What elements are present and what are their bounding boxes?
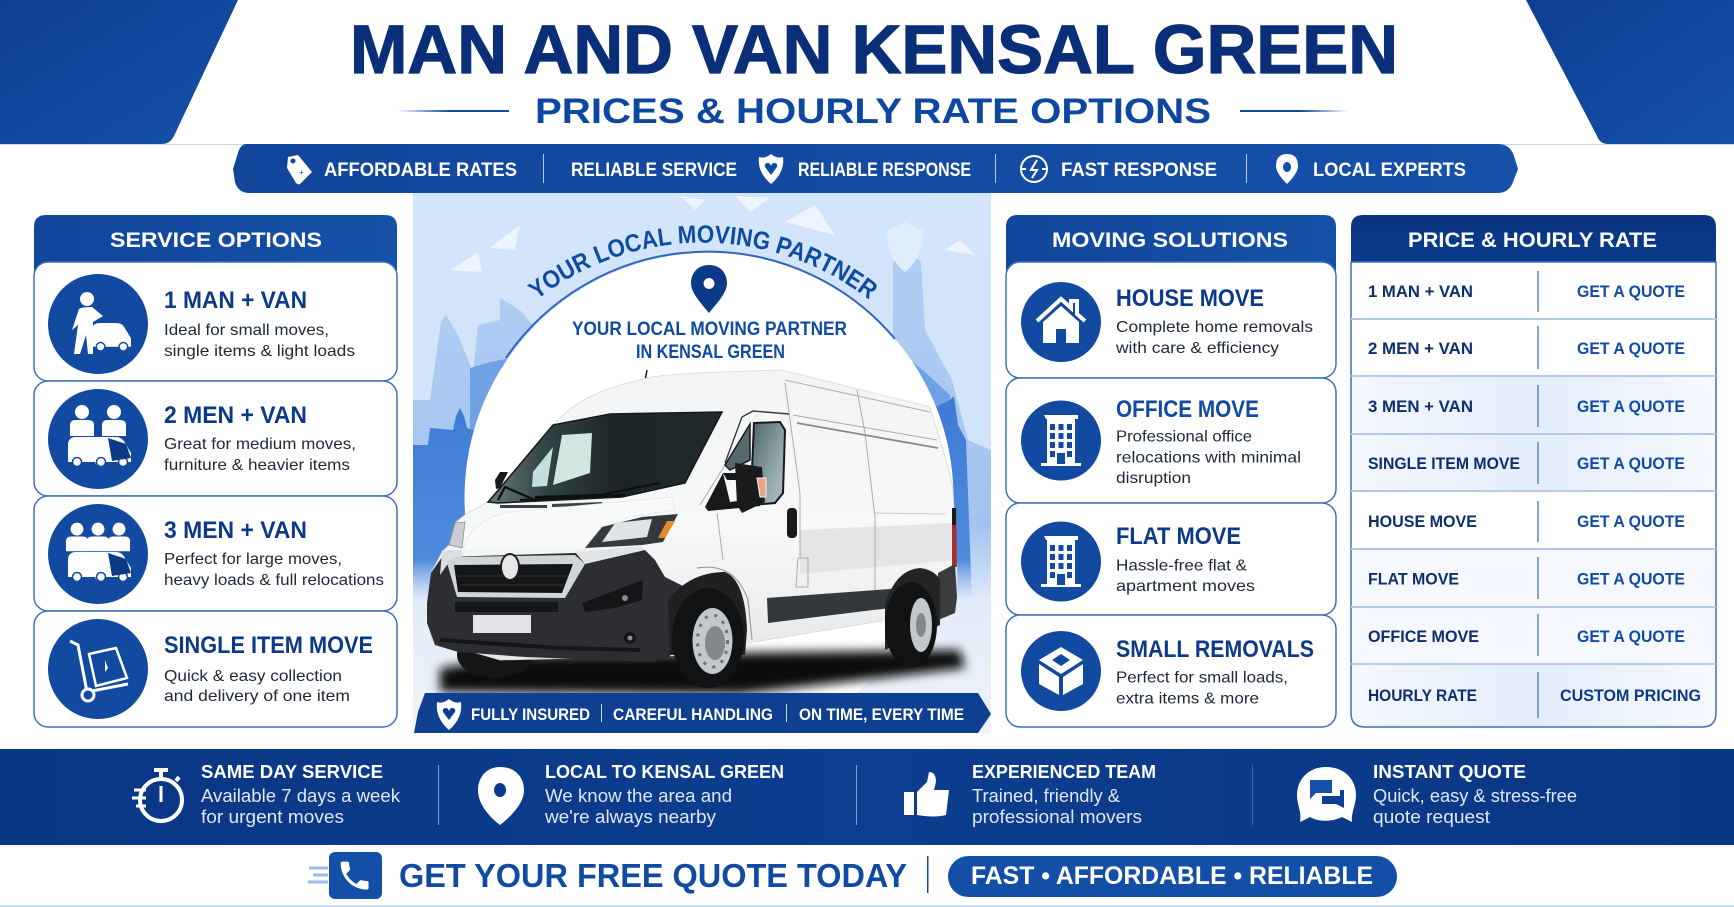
taillight: [952, 508, 957, 567]
pill: fast affordable reliable: FAST • AFFORDABLE • RELIABLE: [971, 862, 1373, 890]
icon: man and van: [48, 274, 148, 374]
tagline: YOUR LOCAL MOVING PARTNER: [572, 319, 847, 340]
van photo illustration: [427, 370, 965, 694]
curved heading: YOUR LOCAL MOVING PARTNER: [526, 225, 877, 300]
card: 2 men + van: Great for medium moves,: [164, 436, 356, 453]
icon: office building: [1021, 400, 1101, 480]
card: flat move: FLAT MOVE: [1116, 523, 1241, 550]
row: 2 men + van: GET A QUOTE: [1577, 340, 1685, 358]
panel: moving solutions: [1006, 215, 1336, 727]
rear bumper: [938, 564, 957, 620]
row: hourly rate: HOURLY RATE: [1368, 687, 1477, 705]
icon: hand truck with box: [48, 619, 148, 719]
benefit: same day service: [132, 762, 401, 827]
panel: service options: [34, 215, 397, 727]
card: 1 man + van: Ideal for small moves,: [164, 322, 329, 339]
row: single item move: GET A QUOTE: [1577, 455, 1685, 473]
row: 3 men + van: [1368, 398, 1685, 416]
right header shape: [1526, 0, 1734, 144]
heading: moving solutions: MOVING SOLUTIONS: [1052, 229, 1288, 252]
benefit: local to kensal green: LOCAL TO KENSAL GREEN: [545, 762, 784, 782]
icon: house: [1021, 282, 1101, 362]
icon: compass: [1021, 156, 1047, 182]
band background: [0, 749, 1734, 845]
left header shape: [0, 0, 238, 144]
row: house move: [1368, 513, 1685, 531]
label: affordable rates: AFFORDABLE RATES: [324, 160, 517, 181]
benefit: experienced team: EXPERIENCED TEAM: [972, 762, 1156, 782]
card: flat move: Hassle-free flat &: [1116, 558, 1247, 574]
city skyline: [413, 196, 991, 600]
card: flat move: apartment moves: [1116, 578, 1255, 595]
guarantee banner: CAREFUL HANDLING: [613, 705, 773, 724]
card: house move: Complete home removals: [1116, 319, 1313, 336]
card: small removals: [1006, 615, 1336, 727]
rear wheel arch: [885, 568, 940, 650]
card: 1 man + van: 1 MAN + VAN: [164, 287, 307, 314]
pill: fast affordable reliable: [948, 856, 1397, 897]
row: 1 man + van: 1 MAN + VAN: [1368, 283, 1473, 301]
benefit: experienced team: [904, 762, 1156, 827]
row: flat move: GET A QUOTE: [1577, 570, 1685, 588]
row: 3 men + van: 3 MEN + VAN: [1368, 398, 1473, 416]
heading: service options: SERVICE OPTIONS: [110, 229, 322, 252]
benefit: local to kensal green: we're always nearby: [544, 807, 716, 827]
benefit: same day service: for urgent moves: [201, 807, 344, 827]
windshield: [488, 412, 722, 503]
front wheel arch: [668, 572, 747, 655]
card: single item move: and delivery of one item: [164, 688, 350, 705]
row: 2 men + van: 2 MEN + VAN: [1368, 340, 1473, 358]
label: reliable service: RELIABLE SERVICE: [571, 160, 737, 181]
rear wheel: [885, 582, 937, 668]
heading: moving solutions: [1006, 215, 1336, 272]
card: office move: relocations with minimal: [1116, 450, 1301, 466]
benefit: instant quote: [1297, 762, 1577, 827]
benefit: instant quote: Quick, easy & stress-free: [1373, 786, 1577, 806]
card: office move: disruption: [1116, 470, 1191, 487]
row: flat move: FLAT MOVE: [1368, 570, 1459, 588]
card: small removals: SMALL REMOVALS: [1116, 636, 1314, 663]
card: 3 men + van: [34, 496, 397, 611]
row: 2 men + van: [1368, 340, 1685, 358]
row: 1 man + van: [1368, 283, 1685, 301]
bumper: [427, 550, 685, 662]
icon: thumbs up: [904, 772, 949, 816]
subtitle: PRICES & HOURLY RATE OPTIONS: [535, 92, 1211, 131]
icon: shield check: [437, 699, 461, 730]
call to action text: GET YOUR FREE QUOTE TODAY: [399, 857, 907, 894]
heading: price and hourly rate: PRICE & HOURLY RATE: [1408, 229, 1657, 252]
benefit: experienced team: Trained, friendly &: [972, 786, 1120, 806]
row: hourly rate: CUSTOM PRICING: [1560, 687, 1701, 705]
label: reliable response: RELIABLE RESPONSE: [798, 160, 971, 181]
headlights: [585, 514, 678, 548]
card: 1 man + van: [34, 262, 397, 381]
card: office move: OFFICE MOVE: [1116, 396, 1259, 423]
icon: box: [1021, 631, 1101, 711]
bar background: [233, 144, 1518, 193]
row: office move: OFFICE MOVE: [1368, 628, 1479, 646]
subtitle rule left: [397, 110, 509, 112]
price table: [1351, 262, 1716, 727]
row: single item move: SINGLE ITEM MOVE: [1368, 455, 1520, 473]
side window and mirror: [725, 411, 789, 463]
header: [0, 0, 1734, 144]
tagline: IN KENSAL GREEN: [636, 342, 785, 363]
row: 1 man + van: GET A QUOTE: [1577, 283, 1685, 301]
icon: price tag: [287, 155, 312, 184]
icon: three men and van: [48, 504, 148, 604]
card: 2 men + van: [34, 381, 397, 496]
card: house move: with care & efficiency: [1115, 340, 1279, 357]
benefit: instant quote: quote request: [1373, 807, 1490, 827]
arc ribbon: [506, 252, 895, 358]
benefit: local to kensal green: [478, 762, 784, 827]
tagline: [572, 319, 847, 363]
icon: map pin: [691, 265, 727, 313]
card: office move: [1006, 378, 1336, 503]
row: flat move: [1368, 570, 1685, 588]
icon: phone: [308, 852, 382, 899]
guarantee banner: FULLY INSURED: [471, 705, 590, 724]
feature bar: [0, 144, 1734, 193]
card: flat move: [1006, 503, 1336, 615]
card: 3 men + van: Perfect for large moves,: [164, 551, 342, 568]
heading: service options: [34, 215, 397, 272]
row: single item move: [1368, 455, 1685, 473]
panel: hero van illustration: [413, 193, 991, 733]
call to action: [308, 852, 1397, 899]
row: hourly rate: [1368, 687, 1701, 705]
card: 2 men + van: 2 MEN + VAN: [164, 402, 307, 429]
icon: chat bubbles: [1297, 767, 1356, 822]
card: 1 man + van: single items & light loads: [164, 343, 355, 360]
icon: apartment building: [1021, 522, 1101, 602]
icon: map pin: [478, 767, 524, 825]
side strip: [767, 588, 903, 623]
card: single item move: Quick & easy collection: [164, 668, 342, 685]
row: house move: GET A QUOTE: [1577, 513, 1685, 531]
panel: price and hourly rate: [1351, 215, 1716, 727]
benefit: local to kensal green: We know the area and: [545, 786, 732, 806]
title: MAN AND VAN KENSAL GREEN: [350, 11, 1398, 88]
benefit: experienced team: professional movers: [972, 807, 1142, 827]
card: office move: Professional office: [1116, 428, 1252, 446]
subtitle rule right: [1240, 110, 1348, 112]
card: small removals: extra items & more: [1116, 690, 1259, 708]
row: office move: [1368, 628, 1685, 646]
card: 3 men + van: 3 MEN + VAN: [164, 517, 307, 544]
guarantee banner: ON TIME, EVERY TIME: [799, 705, 964, 724]
guarantee banner: [414, 693, 991, 733]
icon: two men and van: [48, 389, 148, 489]
icon: shield heart: [759, 154, 783, 184]
card: single item move: [34, 611, 397, 727]
white circle: [464, 253, 954, 742]
icon: price tag: +: [299, 168, 304, 177]
benefit: same day service: SAME DAY SERVICE: [201, 762, 383, 782]
card: 2 men + van: furniture & heavier items: [164, 457, 350, 474]
card: 3 men + van: heavy loads & full relocations: [164, 572, 384, 589]
card: house move: [1006, 262, 1336, 378]
label: fast response: FAST RESPONSE: [1061, 160, 1217, 181]
card: small removals: Perfect for small loads,: [1116, 670, 1288, 686]
front wheel: [672, 588, 744, 688]
card: house move: HOUSE MOVE: [1116, 285, 1264, 312]
icon: location pin: [1276, 154, 1298, 184]
hero background: [413, 193, 991, 733]
benefit: same day service: Available 7 days a week: [201, 786, 401, 806]
icon: stopwatch: [132, 770, 182, 821]
card: single item move: SINGLE ITEM MOVE: [164, 632, 373, 659]
row: 3 men + van: GET A QUOTE: [1577, 398, 1685, 416]
benefit: instant quote: INSTANT QUOTE: [1373, 762, 1526, 782]
benefits band: [0, 749, 1734, 845]
row: house move: HOUSE MOVE: [1368, 513, 1477, 531]
row: office move: GET A QUOTE: [1577, 628, 1685, 646]
heading: price and hourly rate: [1351, 215, 1716, 272]
label: local experts: LOCAL EXPERTS: [1313, 160, 1466, 181]
